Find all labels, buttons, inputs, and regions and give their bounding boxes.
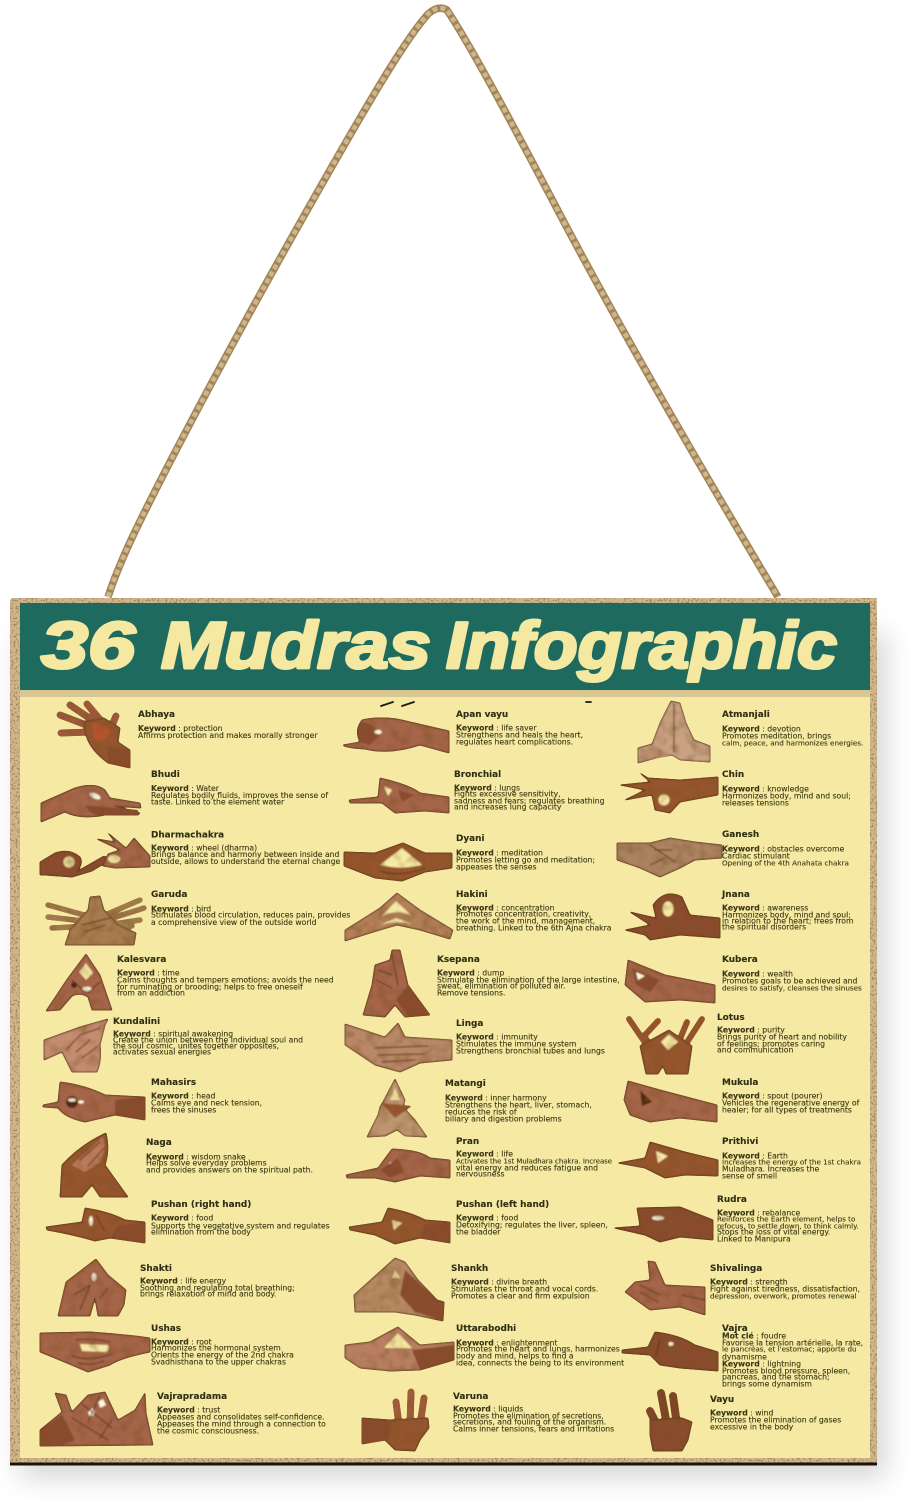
- label: Pran: Pran: [456, 1137, 479, 1147]
- label: Garuda: Garuda: [151, 890, 187, 900]
- label: Mahasirs: Keyword : head: [151, 1092, 215, 1100]
- icon: Matangi hands: [367, 1079, 427, 1137]
- label: Apan vayu: Strengthens and heals the heart,: [456, 730, 583, 740]
- label: Rudra: Keyword : rebalance: [717, 1208, 800, 1218]
- label: Shakti: brings relaxation of mind and body.: [140, 1290, 276, 1298]
- title: 36: [41, 608, 137, 682]
- jute rope: [108, 8, 778, 597]
- label: Chin: Harmonizes body, mind and soul;: [722, 792, 851, 800]
- label: Kubera: Kubera: [722, 955, 758, 965]
- mudra: Bronchial: [349, 770, 605, 813]
- label: Ganesh: Cardiac stimulant: [722, 852, 790, 860]
- mudra: Shakti: [58, 1259, 295, 1316]
- label: Varuna: Varuna: [453, 1392, 488, 1402]
- icon: Ushas hands: [40, 1332, 150, 1372]
- label: Varuna: Keyword : liquids: [453, 1404, 523, 1414]
- mudra: Shankh: [354, 1258, 598, 1321]
- mudra: Dyani: [344, 834, 595, 881]
- label: Pushan left hand: Keyword : food: [456, 1214, 518, 1222]
- label: Ganesh: Keyword : obstacles overcome: [722, 844, 844, 854]
- label: Kalesvara: Kalesvara: [117, 955, 166, 965]
- icon: Pushan right hand: [46, 1208, 145, 1243]
- mudra: Abhaya: [60, 704, 318, 768]
- label: Kundalini: the soul cosmic, unites together opposites,: [113, 1042, 279, 1050]
- label: Uttarabodhi: body and mind, helps to find a: [456, 1352, 574, 1360]
- label: Bhudi: taste. Linked to the element water: [151, 798, 285, 806]
- icon: Ganesh hands: [617, 838, 722, 877]
- label: Lotus: and communication: [717, 1046, 793, 1054]
- label: Ushas: Svadhisthana to the upper chakras: [151, 1358, 286, 1366]
- label: Kalesvara: for ruminating or brooding; helps to free oneself: [117, 982, 303, 992]
- label: Bhudi: Regulates bodily fluids, improves the sense of: [151, 791, 328, 800]
- label: Atmanjali: Atmanjali: [722, 710, 770, 720]
- label: Atmanjali: Keyword : devotion: [722, 724, 801, 734]
- label: Rudra: refocus, to settle down, to think calmly.: [717, 1222, 859, 1230]
- label: Chin: Keyword : knowledge: [722, 784, 809, 794]
- label: Kundalini: Kundalini: [113, 1017, 160, 1027]
- label: Ksepana: Remove tensions.: [437, 988, 505, 998]
- icon: Abhaya hand: [60, 704, 130, 768]
- label: Dharmachakra: Keyword : wheel (dharma): [151, 844, 257, 852]
- label: Dyani: appeases the senses: [456, 862, 537, 872]
- label: Linga: Stimulates the immune system: [456, 1040, 576, 1048]
- label: Prithivi: Prithivi: [722, 1137, 758, 1147]
- label: Rudra: Linked to Manipura: [717, 1234, 791, 1244]
- label: Linga: Keyword : immunity: [456, 1032, 538, 1042]
- icon: Dharmachakra hands: [40, 833, 150, 877]
- title banner: [20, 603, 870, 690]
- label: Dyani: Dyani: [456, 834, 485, 844]
- mudra: Rudra: [614, 1195, 859, 1244]
- mudra: Vayu: [650, 1393, 841, 1451]
- label: Vayu: Promotes the elimination of gases: [710, 1416, 841, 1424]
- mudra: Chin: [620, 770, 851, 813]
- label: Abhaya: Abhaya: [138, 710, 175, 720]
- icon: Linga hands: [345, 1023, 452, 1072]
- label: Lotus: Lotus: [717, 1013, 745, 1023]
- label: Ushas: Harmonizes the hormonal system: [151, 1344, 281, 1352]
- mudra: Vajra: [622, 1324, 863, 1388]
- label: Shivalinga: Keyword : strength: [710, 1278, 788, 1286]
- label: Garuda: Stimulates blood circulation, reduces pain, provides: [151, 910, 350, 920]
- label: Prithivi: Keyword : Earth: [722, 1152, 788, 1160]
- label: Shivalinga: Fight against tiredness, dissatisfaction,: [710, 1284, 860, 1294]
- label: Hakini: Promotes concentration, creativity,: [456, 910, 591, 918]
- icon: Atmanjali hands: [638, 701, 710, 763]
- label: Varuna: Calms inner tensions, fears and irritations: [453, 1424, 614, 1434]
- label: Bronchial: Fights excessive sensitivity,: [454, 790, 561, 798]
- label: Garuda: a comprehensive view of the outside world: [151, 918, 317, 927]
- title: Mudras: [161, 608, 431, 682]
- label: Uttarabodhi: Keyword : enlightenment: [456, 1338, 558, 1348]
- icon: Uttarabodhi hands: [345, 1327, 454, 1371]
- label: Apan vayu: regulates heart complications.: [456, 738, 573, 746]
- label: Kubera: desires to satisfy, cleanses the sinuses: [722, 984, 862, 992]
- label: Pushan right hand: Supports the vegetative system and regulates: [151, 1222, 330, 1230]
- icon: Apan vayu hand: [343, 718, 449, 753]
- paper band under header: [20, 690, 870, 697]
- label: Vajra: Favorise la tension artérielle, la rate,: [722, 1338, 863, 1348]
- icon: Vayu hand: [650, 1393, 692, 1451]
- label: Pushan left hand: the bladder: [456, 1228, 501, 1236]
- label: Jnana: in relation to the heart; frees from: [722, 916, 853, 926]
- label: Pushan left hand: Detoxifying; regulates the liver, spleen,: [456, 1220, 608, 1230]
- label: Chin: releases tensions: [722, 798, 789, 808]
- label: Kalesvara: from an addiction: [117, 988, 185, 998]
- label: Vajra: Mot clé : foudre: [722, 1332, 786, 1340]
- label: Vajra: Vajra: [722, 1324, 748, 1334]
- icon: Pran hand: [346, 1149, 450, 1182]
- label: Uttarabodhi: Promotes the heart and lungs, harmonizes: [456, 1344, 620, 1354]
- label: Linga: Linga: [456, 1019, 483, 1029]
- label: Naga: Helps solve everyday problems: [146, 1158, 267, 1168]
- label: Vajra: brings some dynamism: [722, 1380, 812, 1388]
- label: Bronchial: sadness and fears; regulates breathing: [454, 796, 605, 806]
- label: Ksepana: Keyword : dump: [437, 968, 504, 978]
- icon: Dyani hands: [344, 843, 452, 881]
- label: Shankh: Shankh: [451, 1264, 488, 1274]
- label: Hakini: breathing. Linked to the 6th Ajna chakra: [456, 924, 612, 932]
- mudra: Lotus: [629, 1013, 847, 1074]
- mudra: Matangi: [367, 1079, 592, 1137]
- label: Vajrapradama: Vajrapradama: [157, 1392, 227, 1402]
- icon: Ksepana hands: [363, 950, 430, 1017]
- label: Vajrapradama: Keyword : trust: [157, 1406, 220, 1414]
- label: Matangi: reduces the risk of: [445, 1108, 517, 1116]
- label: Hakini: the work of the mind, management,: [456, 916, 595, 926]
- mudra: Mahasirs: [43, 1078, 262, 1122]
- label: Rudra: Stops the loss of vital energy.: [717, 1228, 830, 1236]
- label: Mahasirs: frees the sinuses: [151, 1106, 216, 1114]
- label: Varuna: Promotes the elimination of secretions,: [453, 1412, 604, 1420]
- mudra: Apan vayu: [343, 710, 583, 753]
- label: Vayu: excessive in the body: [710, 1422, 794, 1432]
- icon: Chin hand: [620, 773, 718, 813]
- mudra: Dharmachakra: [40, 830, 341, 877]
- label: Dyani: Promotes letting go and meditation;: [456, 856, 595, 864]
- icon: Shakti hands: [58, 1259, 126, 1316]
- label: Lotus: Keyword : purity: [717, 1026, 785, 1034]
- mudra: Ganesh: [617, 830, 849, 877]
- label: Matangi: biliary and digestion problems: [445, 1114, 562, 1124]
- icon: Varuna hands: [362, 1392, 429, 1451]
- label: Shankh: Promotes a clear and firm expulsion: [451, 1292, 590, 1300]
- label: Vajra: Promotes blood pressure, spleen,: [722, 1366, 850, 1376]
- label: Mukula: healer; for all types of treatments: [722, 1106, 852, 1114]
- label: Naga: and provides answers on the spiritual path.: [146, 1166, 313, 1174]
- label: Chin: Chin: [722, 770, 744, 780]
- label: Varuna: secretions, and fouling of the organism.: [453, 1418, 606, 1426]
- label: Vajrapradama: the cosmic consciousness.: [157, 1426, 259, 1436]
- label: Bhudi: Bhudi: [151, 770, 180, 780]
- icon: Mahasirs hand: [43, 1082, 145, 1122]
- label: Kalesvara: Calms thoughts and tempers emotions; avoids the need: [117, 976, 334, 984]
- label: Pran: Keyword : life: [456, 1150, 513, 1158]
- label: Matangi: Keyword : inner harmony: [445, 1094, 547, 1102]
- mudra: Naga: [60, 1133, 313, 1197]
- label: Mahasirs: Mahasirs: [151, 1078, 196, 1088]
- label: Kubera: Keyword : wealth: [722, 970, 793, 978]
- mudra: Vajrapradama: [40, 1392, 326, 1446]
- board shadow: [20, 632, 886, 1478]
- label: Dyani: Keyword : meditation: [456, 848, 543, 858]
- icon: Mukula hand: [624, 1081, 717, 1122]
- icon: Prithivi hand: [618, 1142, 718, 1178]
- label: Pushan right hand: Keyword : food: [151, 1214, 213, 1222]
- label: Kubera: Promotes goals to be achieved and: [722, 976, 858, 986]
- icon: Naga hands: [60, 1133, 128, 1197]
- label: Kundalini: activates sexual energies: [113, 1048, 211, 1056]
- label: Bronchial: Keyword : lungs: [454, 784, 520, 792]
- label: Bronchial: and increases lung capacity: [454, 802, 562, 812]
- label: Pushan right hand: Pushan (right hand): [151, 1200, 251, 1210]
- label: Dharmachakra: Brings balance and harmony between inside and: [151, 850, 340, 859]
- label: Jnana: Jnana: [721, 890, 750, 900]
- mudra: Pushan (left hand): [349, 1200, 608, 1244]
- mudra: Prithivi: [618, 1137, 861, 1180]
- mudra: Pran: [346, 1137, 612, 1182]
- wooden board: [10, 598, 877, 1466]
- label: Prithivi: Increases the energy of the 1st chakra: [722, 1158, 861, 1166]
- icon: Hakini hands: [345, 893, 453, 941]
- mudra: Jnana: [625, 890, 853, 940]
- mudra: Ksepana: [363, 950, 620, 1017]
- label: Bronchial: Bronchial: [454, 770, 501, 780]
- mudra: Bhudi: [41, 770, 328, 822]
- label: Lotus: Brings purity of heart and nobility: [717, 1032, 847, 1042]
- icon: Bhudi hand: [41, 785, 141, 822]
- label: Ksepana: Stimulate the elimination of the large intestine,: [437, 976, 620, 984]
- label: Shivalinga: depression, overwork, promotes renewal: [710, 1292, 857, 1300]
- mudra: Shivalinga: [625, 1261, 860, 1315]
- icon: Kundalini hands: [44, 1019, 108, 1072]
- label: Mukula: Vehicles the regenerative energy of: [722, 1098, 860, 1108]
- label: Vajra: Keyword : lightning: [722, 1360, 801, 1368]
- label: Hakini: Keyword : concentration: [456, 904, 554, 912]
- mudra: Ushas: [40, 1324, 294, 1372]
- label: Vayu: Vayu: [710, 1395, 734, 1405]
- label: Jnana: the spiritual disorders: [722, 922, 806, 932]
- icon: Pushan left hand: [349, 1208, 450, 1244]
- label: Vajrapradama: Appeases the mind through a connection to: [157, 1420, 326, 1428]
- icon: Garuda hands: [48, 896, 144, 945]
- icon: Jnana hand: [625, 894, 720, 940]
- icon: Vajrapradama hands: [40, 1392, 153, 1446]
- label: Uttarabodhi: Uttarabodhi: [456, 1324, 516, 1334]
- mudra: Kubera: [625, 955, 862, 1003]
- label: Shakti: Keyword : life energy: [140, 1276, 226, 1286]
- mudra: Linga: [345, 1019, 605, 1072]
- label: Ushas: Keyword : root: [151, 1338, 212, 1346]
- label: Ushas: Orients the energy of the 2nd chakra: [151, 1350, 294, 1360]
- title: [41, 608, 837, 682]
- label: Matangi: Strengthens the heart, liver, stomach,: [445, 1100, 592, 1110]
- label: Kundalini: Create the union between the individual soul and: [113, 1036, 303, 1044]
- label: Pran: Activates the 1st Muladhara chakra. Increase: [456, 1158, 612, 1166]
- label: Vajra: le pancréas, et l'estomac; apporte du: [722, 1344, 857, 1354]
- label: Naga: Naga: [146, 1138, 172, 1148]
- label: Mahasirs: Calms eye and neck tension,: [151, 1098, 262, 1108]
- label: Pushan right hand: elimination from the body: [151, 1228, 251, 1236]
- icon: Lotus hands: [629, 1019, 702, 1074]
- label: Dharmachakra: outside, allows to understand the eternal change: [151, 857, 341, 866]
- label: Shankh: Stimulates the throat and vocal cords.: [451, 1284, 598, 1294]
- label: Vajrapradama: Appeases and consolidates self-confidence.: [157, 1412, 325, 1422]
- label: Uttarabodhi: idea, connects the being to its environment: [456, 1358, 624, 1368]
- label: Atmanjali: Promotes meditation, brings: [722, 732, 831, 740]
- mudra: Hakini: [345, 890, 612, 941]
- label: Dharmachakra: Dharmachakra: [151, 830, 224, 840]
- icon: Kubera hand: [625, 960, 715, 1003]
- mudra: Mukula: [624, 1078, 860, 1122]
- label: Naga: Keyword : wisdom snake: [146, 1152, 246, 1162]
- label: Pran: nervousness: [456, 1170, 505, 1178]
- label: Atmanjali: calm, peace, and harmonizes energies.: [722, 738, 863, 748]
- label: Garuda: Keyword : bird: [151, 904, 211, 914]
- icon: Shivalinga hands: [625, 1261, 705, 1315]
- icon: Rudra hand: [614, 1207, 713, 1242]
- label: Shakti: Soothing and regulating total breathing;: [140, 1284, 295, 1292]
- label: Vayu: Keyword : wind: [710, 1408, 773, 1418]
- label: Shivalinga: Shivalinga: [710, 1264, 762, 1274]
- label: Abhaya: Keyword : protection: [138, 724, 222, 733]
- label: Prithivi: sense of smell: [722, 1172, 777, 1180]
- icon: Kalesvara hands: [46, 954, 112, 1011]
- mudra: Pushan (right hand): [46, 1200, 330, 1243]
- label: Ganesh: Ganesh: [722, 830, 759, 840]
- label: Vajra: pancreas, and the stomach;: [722, 1372, 830, 1382]
- label: Vajra: dynamisme: [722, 1352, 767, 1362]
- label: Matangi: Matangi: [445, 1079, 486, 1089]
- label: Kalesvara: Keyword : time: [117, 968, 180, 978]
- label: Apan vayu: Keyword : life saver: [456, 724, 537, 732]
- yellow poster panel: [20, 697, 870, 1458]
- label: Rudra: Reinforces the Earth element, helps to: [717, 1214, 855, 1224]
- mudra: Garuda: [48, 890, 350, 945]
- ink marks at top of poster: [381, 702, 591, 706]
- label: Jnana: Harmonizes body, mind and soul;: [722, 910, 851, 920]
- mudra: Uttarabodhi: [345, 1324, 624, 1371]
- label: Ksepana: Ksepana: [437, 955, 480, 965]
- icon: Bronchial hand: [349, 778, 449, 813]
- mudra: Kalesvara: [46, 954, 334, 1011]
- label: Abhaya: Affirms protection and makes morally stronger: [138, 731, 318, 740]
- label: Pushan left hand: Pushan (left hand): [456, 1200, 549, 1210]
- label: Bhudi: Keyword : Water: [151, 784, 219, 793]
- label: Rudra: Rudra: [717, 1195, 747, 1205]
- mudra: Atmanjali: [638, 701, 863, 763]
- label: Shankh: Keyword : divine breath: [451, 1278, 547, 1286]
- label: Linga: Strengthens bronchial tubes and lungs: [456, 1046, 605, 1056]
- mudra: Varuna: [362, 1392, 614, 1451]
- icon: Shankh hands: [354, 1258, 444, 1321]
- label: Ganesh: Opening of the 4th Anahata chakra: [722, 858, 849, 868]
- label: Kundalini: Keyword : spiritual awakening: [113, 1030, 233, 1038]
- label: Prithivi: Muladhara. Increases the: [722, 1164, 819, 1174]
- label: Pran: vital energy and reduces fatigue and: [456, 1164, 598, 1172]
- label: Mukula: Keyword : spout (pourer): [722, 1092, 822, 1100]
- label: Ushas: Ushas: [151, 1324, 181, 1334]
- label: Lotus: of feelings; promotes caring: [717, 1040, 825, 1048]
- label: Shakti: Shakti: [140, 1264, 172, 1274]
- icon: Vajra hand: [622, 1332, 718, 1371]
- label: Jnana: Keyword : awareness: [722, 904, 808, 912]
- title: Infographic: [446, 608, 837, 682]
- label: Ksepana: sweat, elimination of polluted air.: [437, 982, 565, 990]
- label: Hakini: Hakini: [456, 890, 488, 900]
- label: Apan vayu: Apan vayu: [456, 710, 508, 720]
- label: Mukula: Mukula: [722, 1078, 758, 1088]
- mudra: Kundalini: [44, 1017, 303, 1072]
